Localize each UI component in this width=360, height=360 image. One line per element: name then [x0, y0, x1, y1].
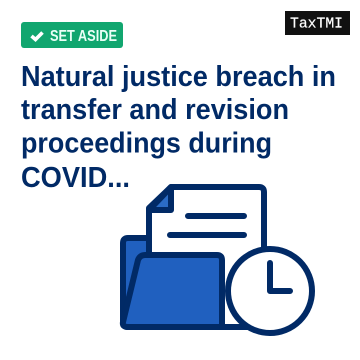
title	[21, 61, 336, 194]
folder base line	[222, 324, 250, 330]
badge label: SET ASIDE	[50, 28, 117, 45]
document fold	[149, 187, 171, 210]
logo: TaxTMI	[285, 11, 350, 35]
folder front	[123, 255, 222, 327]
icon: check mark	[32, 32, 42, 40]
clock	[228, 249, 312, 333]
folder back	[123, 238, 155, 327]
title: transfer and revision	[21, 94, 289, 126]
badge: set aside	[21, 22, 123, 48]
clock hands	[270, 263, 290, 291]
title: COVID...	[21, 162, 130, 194]
title: proceedings during	[21, 128, 272, 160]
icon: folder, document and clock	[123, 187, 312, 333]
title: Natural justice breach in	[21, 61, 336, 93]
document	[149, 187, 264, 327]
logo: TaxTMI: TaxTMI	[290, 16, 343, 32]
document text lines	[170, 216, 244, 235]
